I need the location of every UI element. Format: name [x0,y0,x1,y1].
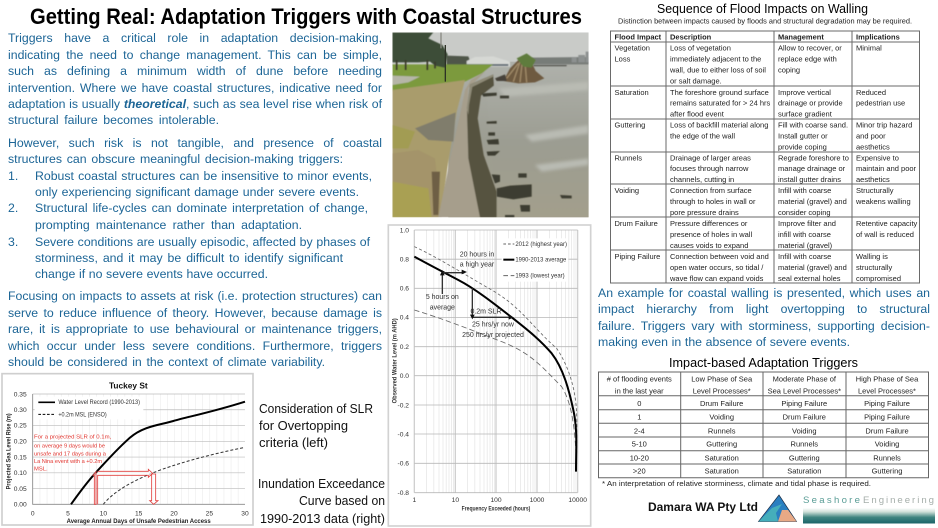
chart: inundation exceedance curve: 0.6 [400,286,409,293]
list: three obscuring factors: only experiencing significant damage under severe events. [35,185,359,199]
chart: inundation exceedance curve [388,225,591,526]
table: adaptation triggers: Piping Failure [864,399,910,408]
chart: Tuckey St sea level rise: 10 [100,510,107,517]
chart: inundation exceedance curve: 20 hours in [460,252,494,259]
chart: Tuckey St sea level rise [2,374,253,525]
table: flood impacts on walling: Infill with coarse [778,252,831,261]
text block: coastal walling example: making even in the absence of severe events. [598,335,850,349]
table: flood impacts on walling: remains saturated for > 24 hrs [670,98,771,108]
table: adaptation triggers [598,372,928,478]
table: flood impacts on walling: replace edge with [778,55,837,64]
table: flood impacts on walling: open water occurs, so tidal / [670,263,764,272]
table: flood impacts on walling: material (gravel) and [778,263,847,272]
table: flood impacts on walling: Improve vertical [778,88,831,97]
text block: focusing on impacts: serve to reduce influence of theory. However, because damage is [8,306,382,320]
chart: inundation exceedance curve: 0.4 [400,315,409,322]
caption: SLR overtopping [259,401,373,450]
caption: SLR overtopping: for Overtopping [259,418,348,433]
table: flood impacts on walling: Pressure differences or [670,219,748,228]
chart: inundation exceedance curve: 5 hours on [426,294,459,301]
table: flood impacts on walling: The foreshore ground surface [670,88,769,97]
table: flood impacts on walling: Infill with coarse [778,186,831,195]
table: adaptation triggers: 5-10 [632,440,647,449]
table: flood impacts on walling: coping [778,66,800,75]
chart: inundation exceedance curve: -0.4 [398,431,409,438]
table: flood impacts on walling: Connection from surface [670,186,752,195]
text block: intangible risk: However, such risk is not tangible, and presence of coastal [8,136,382,150]
chart: inundation exceedance curve: 0.8 [400,256,409,263]
text block: coastal walling example: failure. Triggers vary with storminess, supporting decision- [598,319,930,333]
text block: intangible risk: structures can obscure meaningful decision-making triggers: [8,152,343,166]
text block: focusing on impacts: should be considered in the context of climate variability. [8,355,325,369]
list: three obscuring factors: storminess, and it may be difficult to identify significant [35,251,343,265]
chart: Tuckey St sea level rise: unsafe and 17 days during a [34,451,107,457]
chart: inundation exceedance curve: a high year [460,262,495,269]
logo: Damara WA: Damara WA Pty Ltd [648,500,758,514]
table: flood impacts on walling: focuses through narrow [670,164,749,173]
table: flood impacts on walling: Expensive to [856,154,899,162]
chart: inundation exceedance curve: -0.8 [398,490,409,497]
table: adaptation triggers: Drum Failure [865,426,909,435]
text block: triggers introduction: intervention. Where we have coastal structures, indicative need for [8,81,382,95]
table: adaptation triggers: Level Processes* [858,386,916,395]
table: flood impacts on walling: Loss [614,55,631,64]
table: flood impacts on walling: seal external holes [778,274,841,283]
table: adaptation triggers: Moderate Phase of [773,375,837,384]
chart: Tuckey St sea level rise: 0.35 [14,391,27,398]
table: adaptation triggers: Saturation [705,453,739,462]
logo: Damara WA [648,495,796,522]
table: flood impacts on walling: pore pressure drains [670,208,739,217]
chart: Tuckey St sea level rise: Water Level Record (1990-2013) [58,400,140,406]
caption: inundation exceedance: Inundation Exceedance [258,476,385,491]
table: adaptation triggers: Guttering [872,467,902,476]
table: adaptation triggers: 1 [637,412,641,421]
chart: Tuckey St sea level rise: 20 [170,510,178,517]
chart: Tuckey St sea level rise: 0.20 [14,439,27,446]
table: flood impacts on walling: immediately adjacent to the [670,55,761,64]
legend background [35,397,143,419]
chart: Tuckey St sea level rise: 0 [31,510,35,517]
photo: seawall along the foreshore [392,32,589,217]
table: adaptation triggers: # of flooding events [607,375,672,384]
table: flood impacts on walling: Reduced [856,88,886,97]
chart: inundation exceedance curve: 0.2m SLR [470,309,502,316]
chart: inundation exceedance curve: 0.0 [400,373,409,380]
table: flood impacts on walling: wall, due to either loss of soil [669,66,766,75]
chart: inundation exceedance curve: 1990-2013 average [515,258,567,264]
table: flood impacts on walling: Vegetation [614,44,650,53]
logo: Seashore Engineering: Engineering [863,495,934,506]
list: three obscuring factors: Structural life-cycles can dominate interpretation of change, [35,201,368,215]
list: three obscuring factors: Severe conditions are usually episodic, affected by phases of [35,235,370,249]
table: flood impacts on walling: Allow to recover, or [778,44,842,53]
chart: inundation exceedance curve: -0.2 [398,402,409,409]
table: adaptation triggers: High Phase of Sea [856,375,919,384]
legend background [502,238,568,282]
table: flood impacts on walling: aesthetics [856,175,890,184]
table: flood impacts on walling: maintain and poor [856,164,917,173]
table: flood impacts on walling [610,31,920,283]
chart: Tuckey St sea level rise: 0.15 [14,454,27,461]
table: flood impacts on walling: provide coping [778,142,827,152]
table: flood impacts on walling: Saturation [614,88,649,97]
table: flood impacts on walling: of wall is reduced [856,230,914,239]
heading: sequence of flood impacts: Sequence of Flood Impacts on Walling [657,2,868,16]
table: adaptation triggers: Runnels [708,426,736,435]
caption: SLR overtopping: criteria (left) [259,435,328,450]
table: flood impacts on walling: Structurally [856,186,894,195]
table: flood impacts on walling: Retentive capacity [856,219,918,228]
list: three obscuring factors: 2. [8,201,18,215]
text block: triggers introduction: adaptation is usually theoretical, such as sea level rise when risk of [8,97,382,111]
table: flood impacts on walling: the edge of the wall [670,132,735,140]
text block: focusing on impacts: which occur under less severe conditions. Furthermore, triggers [8,339,382,353]
table: flood impacts on walling: presence of holes in wall [670,230,752,239]
chart: Tuckey St sea level rise: 0.10 [14,470,27,477]
chart: inundation exceedance curve: 250 hrs/yr projected [462,332,524,339]
chart: Tuckey St sea level rise: 0.30 [14,407,27,414]
chart: inundation exceedance curve: -0.6 [398,461,409,468]
chart: Tuckey St sea level rise: 0.05 [14,486,27,493]
chart: Tuckey St sea level rise: +0.2m MSL (ENSO) [58,412,107,418]
table: flood impacts on walling: install gutter drains [778,175,841,184]
chart: Tuckey St sea level rise: For a projected SLR of 0.1m, [34,435,112,441]
text block: intangible risk [8,136,382,166]
table: adaptation triggers: Saturation [787,467,821,476]
chart: inundation exceedance curve: 10 [452,497,459,504]
table: adaptation triggers: Runnels [791,440,818,449]
list: three obscuring factors: change if no severe events have occurred. [35,267,268,281]
text block: focusing on impacts [8,289,382,369]
table: adaptation triggers: >20 [633,467,646,476]
table: flood impacts on walling: Loss of vegetation [670,44,731,53]
text block: coastal walling example: An example for coastal walling is presented, which uses an [598,286,930,300]
table: flood impacts on walling: Drum Failure [614,219,658,228]
footnote: * An interpretation of relative storminess, climate and tidal phase is required. [602,479,871,488]
table: flood impacts on walling: Voiding [614,186,639,195]
table: flood impacts on walling: Description [670,32,712,42]
table: flood impacts on walling: manage drainage or [778,164,846,173]
caption: inundation exceedance: 1990-2013 data (right) [260,511,385,526]
table: adaptation triggers: Piping Failure [864,412,910,421]
palm [495,53,544,83]
table: flood impacts on walling: Piping Failure [614,252,660,261]
table: flood impacts on walling: Regrade foreshore to [778,154,849,162]
table: flood impacts on walling: Guttering [614,120,645,130]
table: flood impacts on walling: Install gutter or [778,132,828,140]
list: three obscuring factors: 1. [8,169,18,183]
chart: inundation exceedance curve: 25 hrs/yr now [472,322,515,329]
chart: Tuckey St sea level rise: on average 9 days would be [34,443,105,449]
table: adaptation triggers: Level Processes* [693,386,751,395]
chart: Tuckey St sea level rise: La Nina event with a +0.2m [34,459,102,465]
table: flood impacts on walling: Fill with coarse sand. [778,120,848,130]
table: flood impacts on walling: Drainage of larger areas [670,154,751,162]
table: flood impacts on walling: pedestrian use [856,98,905,108]
table: adaptation triggers: 0 [637,399,641,408]
text block: triggers introduction: structural failure becomes intolerable. [8,113,219,127]
table: adaptation triggers: Voiding [709,412,734,421]
chart: inundation exceedance curve: 1000 [530,497,545,504]
caption: SLR overtopping: Consideration of SLR [259,401,373,416]
chart: Tuckey St sea level rise: Average Annual Days of Unsafe Pedestrian Access [67,519,211,525]
table: adaptation triggers: Drum Failure [783,412,826,421]
list: three obscuring factors: prompting maintenance rather than adaptation. [35,218,302,232]
logo: Seashore Engineering: Seashore [803,495,860,506]
chart: Tuckey St sea level rise: 25 [206,510,213,517]
text block: triggers introduction: indicating the need to change management. This can be simple, [8,48,382,62]
chart: Tuckey St sea level rise: 30 [241,510,249,517]
table: flood impacts on walling: channels, cutting in [670,175,734,184]
table: flood impacts on walling: Minimal [856,44,882,53]
chart: inundation exceedance curve: 1993 (lowest year) [515,274,565,280]
heading: impact-based adaptation triggers: Impact-based Adaptation Triggers [669,356,858,370]
table: adaptation triggers: Saturation [705,467,739,476]
table: flood impacts on walling: Implications [856,32,900,42]
table: flood impacts on walling: wave flow can expand voids [669,274,764,283]
table: flood impacts on walling: material (gravel) [778,241,833,250]
table: flood impacts on walling: through to holes in wall or [670,197,756,206]
table: flood impacts on walling: compromised [856,274,901,283]
table: adaptation triggers: 2-4 [634,426,645,435]
table: flood impacts on walling: Management [778,32,824,42]
table: flood impacts on walling: consider coping [778,208,831,217]
subheading: distinction note: Distinction between impacts caused by floods and structural degradation may be required. [618,16,912,26]
table: adaptation triggers: Guttering [706,440,737,449]
table: adaptation triggers: Piping Failure [781,399,827,408]
table: flood impacts on walling: Connection between void and [670,252,769,261]
chart: Tuckey St sea level rise: 0.25 [14,423,27,430]
table: adaptation triggers: Low Phase of Sea [691,375,753,384]
table: adaptation triggers: in the last year [615,386,664,395]
table: flood impacts on walling: drainage or provide [778,98,843,108]
text block: triggers introduction: such as defining a minimum width of dune before needing [8,64,382,78]
text block: triggers introduction [8,31,382,127]
table: adaptation triggers: Drum Failure [700,399,743,408]
caption: inundation exceedance: Curve based on [299,493,385,508]
text block: focusing on impacts: rare, it is appropriate to use behavioural or maintenance triggers, [8,322,382,336]
caption: inundation exceedance [258,476,385,526]
text block: coastal walling example: impact hierarchy from light overtopping to structural [598,302,930,316]
chart: Tuckey St sea level rise: Tuckey St [109,380,148,390]
logo: Seashore Engineering [803,495,935,524]
table: flood impacts on walling: structurally [856,263,893,272]
table: flood impacts on walling: after flood event [670,110,725,118]
text block: focusing on impacts: Focusing on impacts to assets at risk (i.e. protection structures) can [8,289,382,303]
chart: inundation exceedance curve: 0.2 [400,344,409,351]
chart: inundation exceedance curve: average [430,304,455,311]
table: flood impacts on walling: or salt damage. [670,76,722,86]
text block: coastal walling example [598,286,930,349]
table: adaptation triggers: Voiding [792,426,817,435]
table: flood impacts on walling: surface gradient [778,110,833,118]
table: flood impacts on walling: Runnels [614,154,642,162]
table: flood impacts on walling: Flood Impact [614,32,662,42]
chart: inundation exceedance curve: 1.0 [400,227,409,234]
table: flood impacts on walling: Walling is [856,252,888,261]
chart: inundation exceedance curve: Observed Water Level (m AHD) [393,318,399,403]
table: flood impacts on walling: Minor trip hazard [856,120,912,130]
title: Getting Real: Adaptation Triggers with Coastal Structures [30,4,582,29]
chart: Tuckey St sea level rise: 0.00 [14,502,27,509]
table: flood impacts on walling: and poor [856,132,886,140]
chart: Tuckey St sea level rise: MSL. [34,466,48,472]
water ripples [498,82,589,172]
chart: Tuckey St sea level rise: 15 [135,510,143,517]
table: flood impacts on walling: aesthetics [856,142,890,152]
chart: inundation exceedance curve: 1 [412,497,416,504]
chart: inundation exceedance curve: Frequency Exceeded (hours) [462,507,530,513]
list: three obscuring factors: Robust coastal structures can be insensitive to minor events, [35,169,372,183]
table: flood impacts on walling: material (gravel) and [778,197,847,206]
table: adaptation triggers: Sea Level Processes* [768,386,841,395]
list: three obscuring factors [8,169,372,281]
chart: Tuckey St sea level rise: 5 [66,510,70,517]
trees [392,32,448,70]
chart: Tuckey St sea level rise: Projected Sea Level Rise (m) [7,413,13,489]
table: adaptation triggers: Guttering [789,453,820,462]
text block: triggers introduction: Triggers have a critical role in adaptation decision-making, [8,31,382,45]
rocks [482,93,572,217]
table: flood impacts on walling: Loss of backfill material along [670,120,768,130]
chart: inundation exceedance curve: 2012 (highest year) [515,242,567,248]
table: flood impacts on walling: causes voids to expand [670,241,748,250]
table: flood impacts on walling: weakens walling [855,197,911,206]
table: flood impacts on walling: Improve filter and [778,219,836,228]
table: adaptation triggers: Voiding [875,440,899,449]
table: adaptation triggers: 10-20 [630,453,649,462]
table: flood impacts on walling: infill with coarse [778,230,831,239]
table: adaptation triggers: Runnels [873,453,901,462]
chart: inundation exceedance curve: 100 [490,497,502,504]
list: three obscuring factors: 3. [8,235,18,249]
chart: inundation exceedance curve: 10000 [568,497,587,504]
